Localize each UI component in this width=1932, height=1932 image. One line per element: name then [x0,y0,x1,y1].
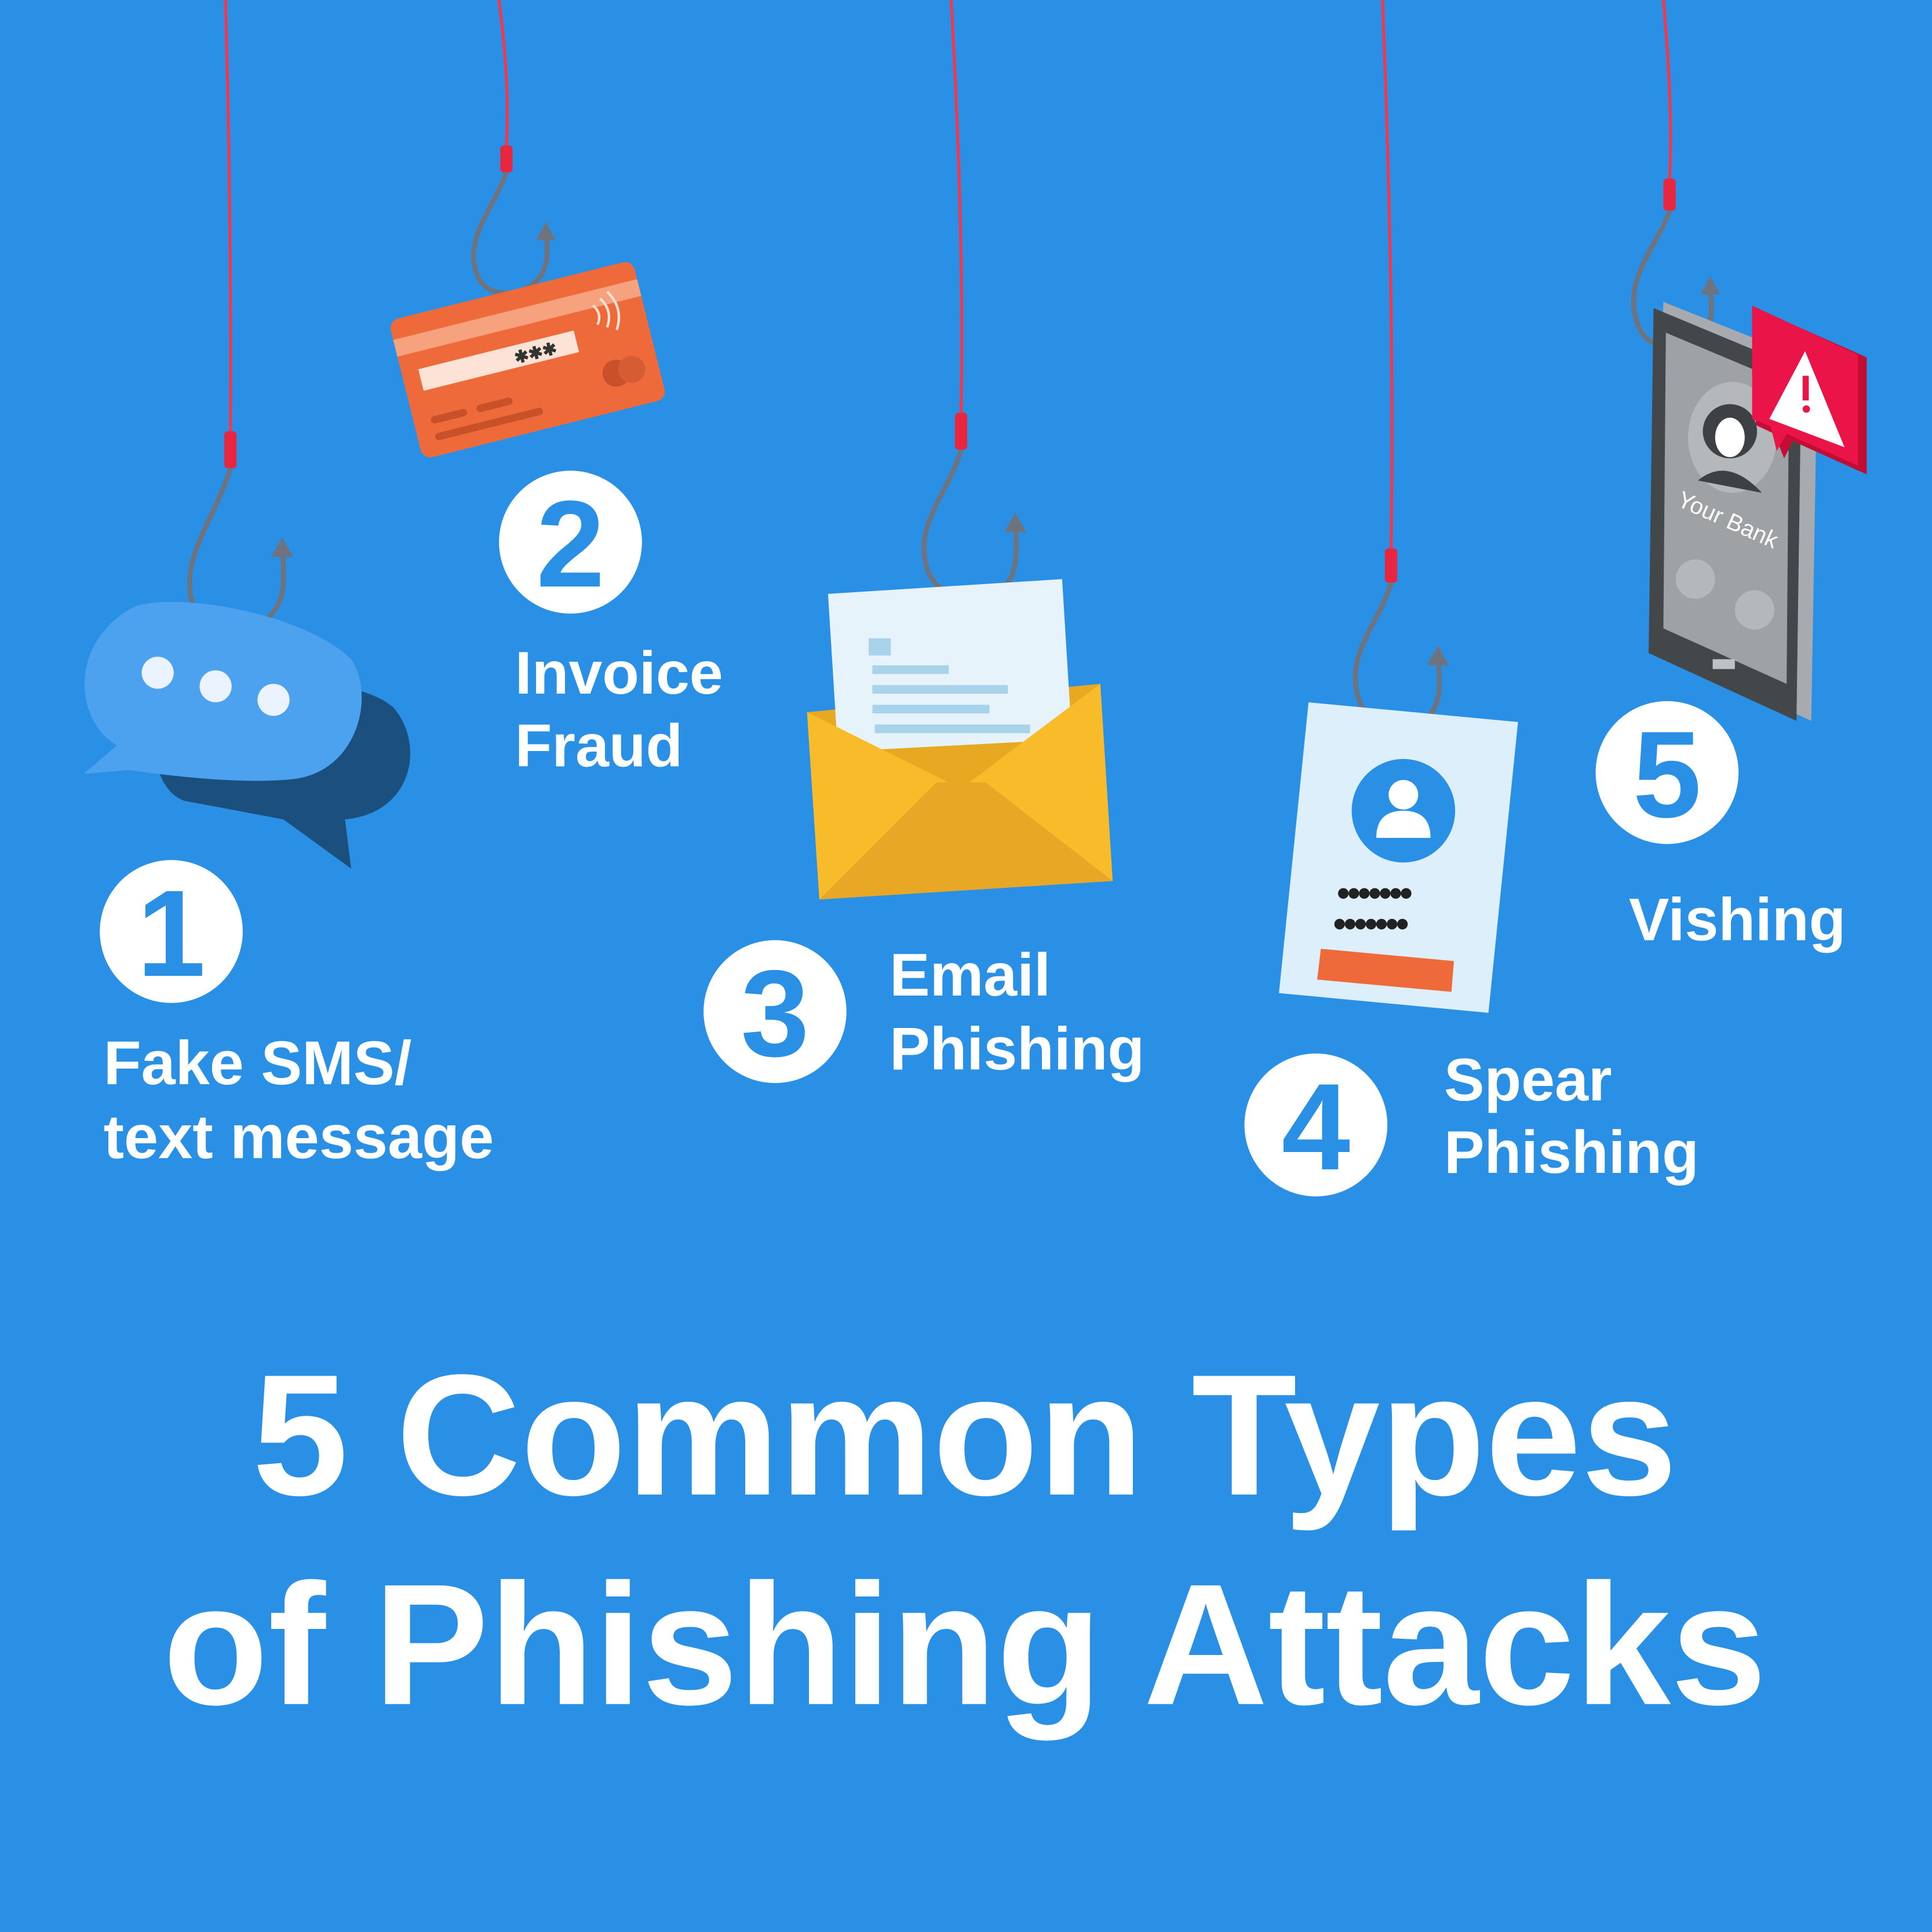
icon: ID login card: ••••••• [1333,903,1408,945]
number badge 2 [499,471,642,614]
icon: phone with warning [1649,302,1867,721]
icon: envelope with letter [807,579,1113,899]
item 1: fake SMS [84,0,494,1172]
number badge 1 [100,860,243,1003]
label 1: text message [104,1103,494,1172]
number badge 2: 2 [536,476,605,613]
item 2: invoice fraud [388,0,723,780]
label 4: Phishing [1444,1119,1699,1186]
number badge 3 [703,940,847,1083]
fishing line 5 [1634,0,1720,349]
item 4: spear phishing [1245,0,1699,1197]
number badge 4: 4 [1282,1059,1350,1196]
fishing line 2 [473,0,556,293]
number badge 5: 5 [1633,706,1701,844]
label 5: Vishing [1629,886,1846,953]
label 2: Fraud [515,713,683,780]
fishing line 1 [189,0,293,632]
icon: ID login card [1279,702,1518,1013]
number badge 1: 1 [137,865,206,1003]
title: of Phishing Attacks [163,1549,1767,1742]
label 4: Spear [1444,1047,1612,1114]
icon: credit card [388,260,667,460]
title: 5 Common Types [252,1339,1677,1532]
label 2: Invoice [515,640,723,707]
number badge 4 [1245,1054,1387,1197]
item 3: email phishing [703,0,1144,1083]
label 3: Email [890,942,1051,1009]
label 3: Phishing [890,1016,1144,1083]
label 1: Fake SMS/ [104,1029,411,1098]
fishing line 4 [1355,0,1449,727]
item 5: vishing [1596,0,1867,953]
icon: chat bubbles [84,602,410,869]
number badge 5 [1596,701,1738,844]
number badge 3: 3 [741,945,810,1082]
icon: phone with warning: Your Bank [1674,486,1782,553]
icon: credit card: ✱✱✱ [512,339,559,368]
fishing line 3 [924,0,1026,599]
icon: ID login card: ••••••• [1337,872,1412,914]
